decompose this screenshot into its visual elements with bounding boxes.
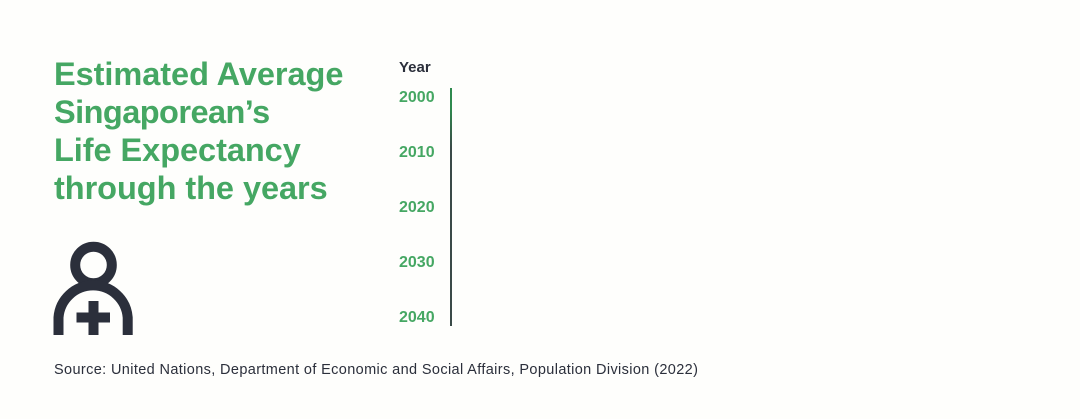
- year 2040: 2040: [399, 309, 435, 326]
- icon: person with medical cross: [54, 242, 133, 335]
- title: Life Expectancy: [54, 132, 301, 168]
- title: Estimated Average: [54, 56, 343, 92]
- title: [54, 56, 343, 206]
- year 2020: 2020: [399, 199, 435, 216]
- year 2030: 2030: [399, 254, 435, 271]
- year 2000: 2000: [399, 89, 435, 106]
- source note: Source: United Nations, Department of Economic and Social Affairs, Population Division (2022): [54, 362, 698, 378]
- title: through the years: [54, 170, 328, 206]
- title: Singaporean’s: [54, 94, 270, 130]
- year 2010: 2010: [399, 144, 435, 161]
- timeline axis line: [450, 88, 452, 326]
- year axis labels: [399, 89, 435, 326]
- axis heading: Year: Year: [399, 59, 431, 76]
